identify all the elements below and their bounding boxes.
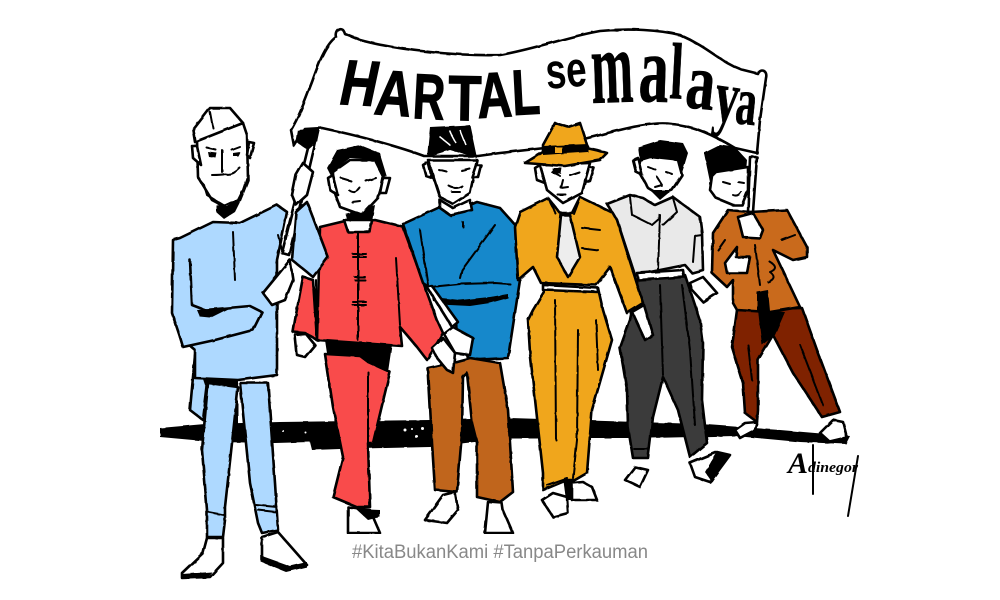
artist signature <box>786 445 858 516</box>
banner text: malaya: y <box>710 54 745 140</box>
banner <box>291 8 766 156</box>
artist signature: dinegor <box>808 460 858 476</box>
banner text: malaya: m <box>589 8 635 126</box>
banner text: HARTAL: H <box>334 47 386 120</box>
banner text: HARTAL: L <box>510 56 542 129</box>
banner text: malaya: l <box>668 28 686 117</box>
banner text: malaya <box>589 8 761 140</box>
figure 2: man in red shirt and trousers <box>293 145 443 533</box>
white mask below figure 2 and 3 feet <box>340 534 530 540</box>
banner text: HARTAL: A <box>371 56 418 130</box>
banner text: se: se <box>543 41 589 100</box>
figure 6: man in fez and brown jacket holding pole <box>704 145 847 442</box>
banner text: HARTAL: R <box>411 60 447 134</box>
figure 3: man in blue shirt, fez and brown trousers <box>403 125 520 533</box>
hashtags: #KitaBukanKami #TanpaPerkauman <box>352 542 648 563</box>
artist signature: A <box>786 447 808 480</box>
banner text: malaya: a <box>682 37 720 128</box>
banner text: malaya: a <box>732 62 761 140</box>
ground shadow <box>160 418 850 450</box>
banner text: HARTAL: A <box>475 58 514 132</box>
figure 2 pointing hand <box>432 338 455 373</box>
banner text: malaya: a <box>637 15 671 123</box>
figure 4: man in orange suit, hat and grey tie <box>515 123 653 517</box>
banner text: HARTAL: T <box>448 62 482 135</box>
banner text: HARTAL <box>334 47 542 135</box>
figure 5: man in grey shirt and dark trousers <box>607 140 730 487</box>
figure 1: bearded man in light blue baju melayu holding pole <box>172 108 328 579</box>
